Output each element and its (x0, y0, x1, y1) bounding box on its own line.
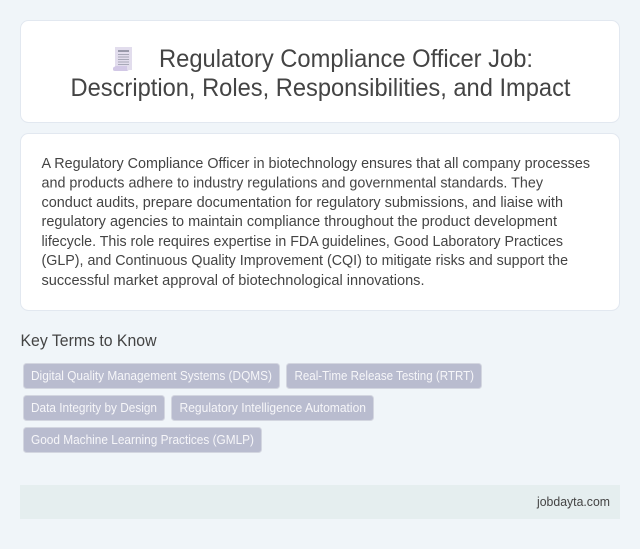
title text (70, 45, 571, 102)
footer source text: jobdayta.com (536, 495, 610, 509)
chip: RTRT: Real-Time Release Testing (RTRT) (294, 368, 474, 383)
heading: key terms: Key Terms to Know (20, 332, 157, 350)
chip: regulatory intelligence (172, 396, 374, 420)
title text: Description, Roles, Responsibilities, and Impact (70, 74, 571, 102)
footer bar (20, 485, 620, 519)
description text: lifecycle. This role requires expertise in FDA guidelines, Good Laboratory Practices (42, 234, 563, 250)
chip: RTRT (286, 364, 482, 388)
chip: regulatory intelligence: Regulatory Intelligence Automation (180, 400, 366, 415)
chip: GMLP (24, 428, 262, 452)
chip: GMLP: Good Machine Learning Practices (GMLP) (31, 432, 254, 447)
chip: DQMS: Digital Quality Management Systems (DQMS) (31, 368, 272, 383)
description text: (GLP), and Continuous Quality Improvement (CQI) to mitigate risks and support the (42, 253, 568, 269)
panel: description (20, 134, 620, 310)
description text: successful market approval of biotechnological innovations. (42, 273, 424, 289)
icon: document scroll (113, 47, 132, 71)
description text: A Regulatory Compliance Officer in biotechnology ensures that all company processes (42, 156, 590, 172)
description text: conduct audits, prepare documentation for regulatory submissions, and liaise with (42, 195, 563, 211)
title text: Regulatory Compliance Officer Job: (159, 45, 533, 73)
description text: and products adhere to industry regulations and governmental standards. They (42, 176, 544, 192)
panel: title card (20, 20, 620, 122)
description text (42, 156, 590, 289)
chip: data integrity: Data Integrity by Design (31, 400, 157, 415)
chip: DQMS (24, 364, 280, 388)
chip: data integrity (24, 396, 164, 420)
description text: regulatory agencies to maintain compliance throughout the product development (42, 214, 557, 230)
